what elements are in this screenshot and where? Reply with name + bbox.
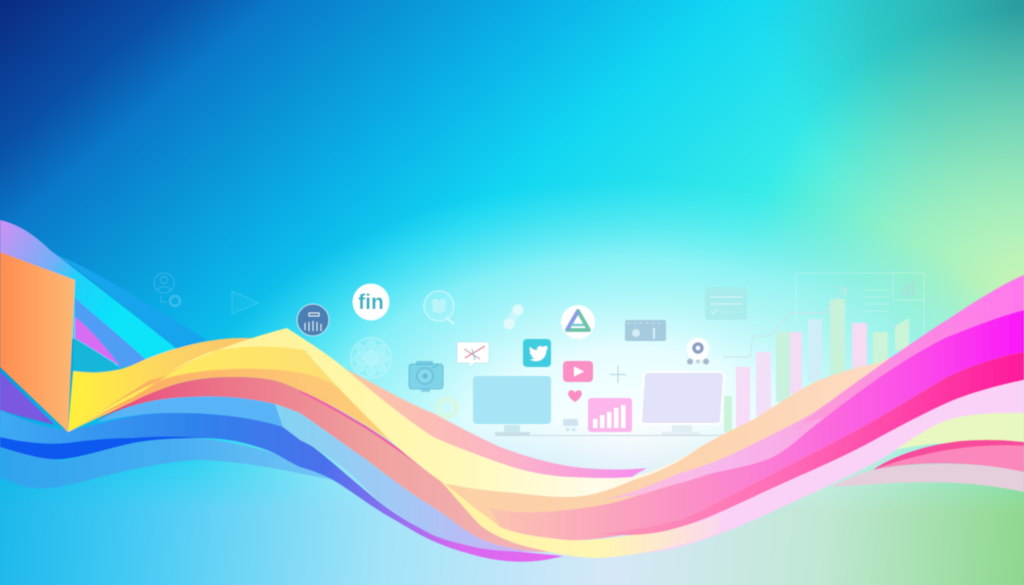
- ribbon: saturated blue core: [0, 436, 205, 459]
- icon: checklist card: [705, 287, 747, 320]
- icon: heart: [568, 390, 582, 402]
- ribbon: purple strand: [0, 372, 55, 425]
- ribbon: second hot pink wisp: [873, 440, 1024, 472]
- icon: twitter tile: [523, 339, 551, 367]
- ribbons: [0, 220, 1024, 562]
- ribbon: magenta strand: [75, 317, 120, 366]
- ribbon: grey pink wisp: [830, 464, 1024, 492]
- ribbon: peach sweep: [443, 357, 890, 528]
- icon: toolbar card: [625, 320, 666, 341]
- icon: camera: [409, 361, 443, 392]
- ribbon: orange folded corner: [0, 252, 75, 432]
- ribbon: pale pink underlay: [640, 375, 1024, 553]
- ribbon: pale band: [275, 404, 540, 552]
- icon: blue monitor: [473, 376, 551, 435]
- ribbon: deep blue back strand: [57, 255, 207, 349]
- icon: settings badge: [686, 338, 710, 364]
- icon: link dots: [504, 304, 524, 330]
- ribbon: periwinkle strand: [75, 298, 147, 368]
- icon: fin badge: fin: [358, 291, 384, 314]
- ribbon: magenta edge: [300, 391, 433, 474]
- ribbon: light pink band: [600, 358, 900, 500]
- ribbon: red to salmon band: [97, 377, 560, 552]
- icon cluster: [154, 273, 924, 436]
- icon: faint play triangle: [232, 291, 258, 314]
- ribbon: pale lower yellow: [433, 473, 720, 558]
- ribbon: wisp magenta edge: [873, 440, 1024, 470]
- ribbon: orange band: [68, 345, 393, 443]
- ribbon: teal gap: [73, 338, 120, 372]
- ribbon: pale lower blue veil: [0, 438, 345, 488]
- icon: small device: [563, 419, 578, 431]
- ribbon: hot pink band: [600, 352, 1024, 535]
- ribbon: pale lime patch: [895, 413, 1024, 450]
- ribbon: yellow mid fold: [68, 328, 393, 443]
- ribbon: pink top strand: [343, 368, 647, 478]
- icon: message bubble: [457, 342, 489, 368]
- icon: signal bar card: [588, 398, 632, 432]
- ribbon: fold highlight: [170, 328, 305, 372]
- icon: dark chart circle: [297, 304, 329, 336]
- bar chart with rising arrow: [724, 273, 924, 432]
- ribbon: main pink to magenta sweep: [490, 310, 1024, 540]
- ribbon: light blue shoulder: [97, 396, 283, 427]
- ribbon: yellow left band: [68, 328, 287, 432]
- icon: ring: [438, 399, 456, 417]
- icon: flower wheel: [351, 338, 391, 378]
- baseline: [495, 434, 730, 436]
- icon: faint profile: [154, 273, 180, 306]
- icon: fin badge: [352, 284, 390, 320]
- icon: video tile: [563, 361, 593, 382]
- icon: triangle logo badge: [561, 305, 595, 339]
- icon: chat heart: [424, 291, 454, 324]
- icon: lilac monitor: [641, 372, 724, 435]
- icon: plus: [610, 366, 626, 383]
- ribbon: lower blue to violet band: [0, 410, 563, 562]
- ribbon: big pale yellow fold: [287, 328, 700, 497]
- ribbon: upper left lavender to cyan band: [0, 220, 177, 368]
- ribbon: top pink band: [800, 275, 1024, 425]
